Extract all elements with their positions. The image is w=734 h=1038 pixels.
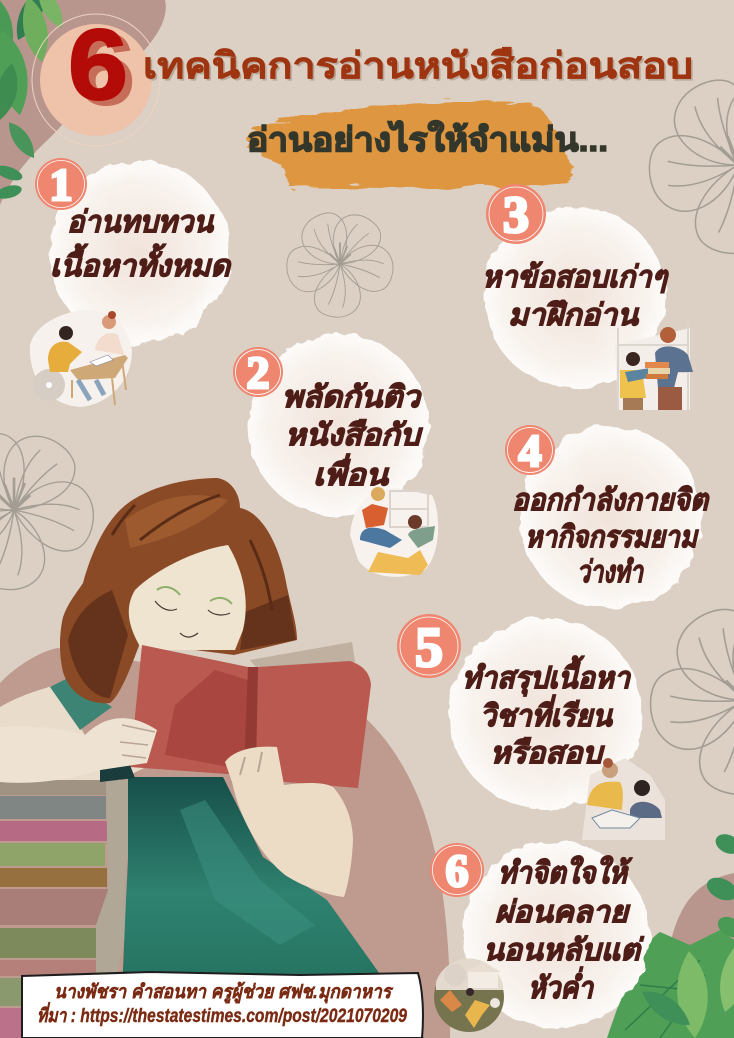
step 1 text: อ่านทบทวน xyxy=(67,206,214,239)
face xyxy=(129,545,246,650)
forearm and hand holding book xyxy=(225,747,353,897)
shoulder and upper arm xyxy=(0,685,160,790)
step 2 badge xyxy=(233,347,283,398)
title: เทคนิคการอ่านหนังสือก่อนสอบ xyxy=(143,45,693,86)
title: เทคนิคการอ่านหนังสือก่อนสอบ xyxy=(145,47,695,88)
flower: middle xyxy=(284,206,396,319)
leaves: bottom right xyxy=(607,830,734,1038)
lower arm and hand on left xyxy=(0,718,157,783)
flower: top right xyxy=(645,69,734,257)
step 3 blob xyxy=(484,206,666,388)
step 5 text: วิชาที่เรียน xyxy=(480,694,613,733)
eyes, brows and smile xyxy=(155,587,232,637)
step 4 text xyxy=(512,484,710,589)
step 1 blob xyxy=(48,161,230,343)
step 5 blob xyxy=(450,618,642,810)
step 3 badge xyxy=(486,184,546,244)
step 6 text: ผ่อนคลาย xyxy=(495,896,630,929)
step 2 illustration xyxy=(350,487,438,577)
step 5 text xyxy=(462,655,631,770)
step 3 illustration xyxy=(615,325,693,410)
step 2 badge: 2 xyxy=(246,347,270,398)
step 3 text: มาฝึกอ่าน xyxy=(508,299,640,332)
step 4 xyxy=(505,425,710,609)
step 4 blob xyxy=(520,427,702,609)
step 1 illustration xyxy=(30,310,132,407)
title badge: big 6 xyxy=(32,9,160,146)
step 3 badge: 3 xyxy=(503,187,529,244)
flower: lower right xyxy=(646,598,734,798)
subtitle on orange brush: อ่านอย่างไรให้จำแม่น... xyxy=(247,120,608,158)
step 2 text: พลัดกันติว xyxy=(282,381,422,414)
step 6 illustration xyxy=(434,959,504,1032)
step 4 text: หากิจกรรมยาม xyxy=(525,521,699,554)
title badge: big 6: 6 xyxy=(68,9,128,121)
decorative blob: behind woman xyxy=(0,648,450,1038)
dress xyxy=(120,777,424,1038)
step 6 text: ทำจิตใจให้ xyxy=(498,855,633,890)
book cover xyxy=(130,645,371,788)
footer text: ที่มา : https://thestatestimes.com/post/2021070209 xyxy=(37,1002,407,1027)
footer text: นางพัชรา คำสอนทา ครูผู้ช่วย ศฟช.มุกดาหาร xyxy=(54,981,394,1004)
step 3 xyxy=(482,184,693,410)
step 5 illustration xyxy=(582,758,665,840)
footer credit box xyxy=(22,972,423,1038)
woman reading illustration xyxy=(0,478,424,1038)
step 2 blob xyxy=(247,334,429,516)
step 2 text: เพื่อน xyxy=(313,453,390,492)
step 6 text xyxy=(483,855,644,1005)
step 1 badge xyxy=(35,158,87,210)
step 1 badge: 1 xyxy=(50,159,72,210)
step 5 text: หรือสอบ xyxy=(490,737,605,770)
leaves: top left xyxy=(0,0,69,201)
title badge: big 6: 6 xyxy=(75,14,135,126)
stack of books xyxy=(0,780,130,1038)
step 2 text: หนังสือกับ xyxy=(285,419,423,452)
step 1 text xyxy=(50,206,232,283)
footer text xyxy=(37,981,407,1027)
green sleeve xyxy=(50,678,112,730)
step 4 text: ออกกำลังกายจิต xyxy=(512,484,710,517)
step 1 text: เนื้อหาทั้งหมด xyxy=(50,243,232,283)
step 6 blob xyxy=(463,842,649,1028)
step 4 text: ว่างทำ xyxy=(577,556,644,589)
step 5 badge: 5 xyxy=(415,617,443,679)
step 6 badge: 6 xyxy=(446,845,468,896)
step 6 text: หัวค่ำ xyxy=(528,966,594,1005)
step 4 badge xyxy=(505,425,555,476)
step 3 text xyxy=(482,261,669,332)
step 5 text: ทำสรุปเนื้อหา xyxy=(462,655,631,697)
step 6 text: นอนหลับแต่ xyxy=(483,934,644,967)
step 2 text xyxy=(282,381,423,492)
book pages xyxy=(250,642,355,672)
hair xyxy=(60,478,297,703)
step 4 badge: 4 xyxy=(518,425,542,476)
step 6 badge xyxy=(430,843,484,897)
subtitle on orange brush xyxy=(247,102,608,188)
decorative blob: top left xyxy=(0,0,166,205)
step 1 xyxy=(30,158,232,407)
step 6 xyxy=(430,842,649,1032)
step 3 text: หาข้อสอบเก่าๆ xyxy=(482,261,669,294)
flower: left xyxy=(0,424,98,593)
decorative blob: bottom right xyxy=(640,873,734,1038)
step 5 badge xyxy=(397,614,461,679)
step 2 xyxy=(233,334,438,577)
step 5 xyxy=(397,614,665,840)
